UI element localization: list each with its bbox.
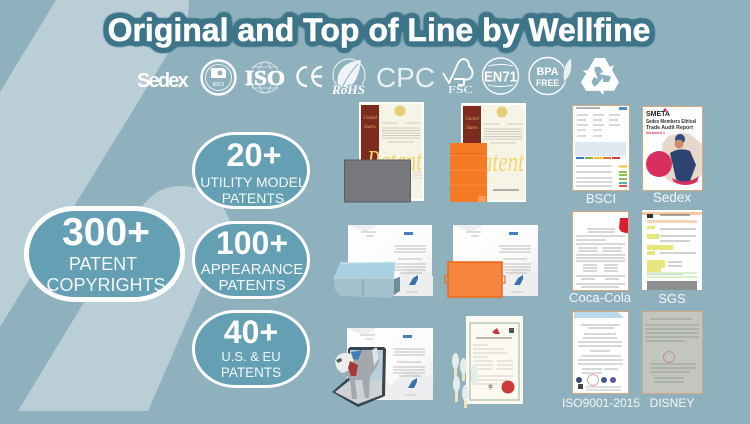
logo: recycling arrows: [577, 58, 622, 99]
logo: BPA free: FREE: [536, 78, 559, 89]
patent certificate with orange tray: States: [466, 126, 478, 131]
logo: CPC: CPC: [376, 62, 435, 93]
logo: FSC: [443, 59, 473, 96]
patent certificate with grey tray: [344, 102, 424, 202]
badge: 300+ patent copyrights: COPYRIGHTS: [46, 275, 166, 295]
tray: dark frame: [332, 347, 386, 407]
logo: RoHS: [331, 59, 365, 97]
appearance certificate with dog on tray: [332, 328, 433, 407]
document labels: [562, 190, 694, 410]
document labels: DISNEY: [650, 396, 694, 410]
document labels: SGS: [658, 291, 686, 306]
badge: 20+ utility model patents: 20+: [226, 137, 282, 173]
logo: BSCI: BSCI: [213, 82, 224, 88]
logo: EN71: [482, 58, 518, 94]
audit document: BSCI: [572, 106, 630, 190]
audit document: SGS: [642, 210, 702, 290]
copyright certificate with pads: 学: [488, 384, 493, 391]
badge: 20+ utility model patents: UTILITY MODEL: [200, 174, 306, 190]
audit document: Sedex SMETA: SMETA: [646, 111, 670, 118]
patent certificate with orange tray: United: [465, 117, 479, 122]
badge: 40+ U.S. and EU patents: [194, 312, 308, 386]
logo: CE mark: [297, 67, 322, 86]
logo: BPA free: BPA: [536, 66, 559, 78]
certification logos row: [137, 58, 622, 99]
document labels: ISO9001-2015: [562, 396, 640, 410]
audit document: ISO9001: [572, 312, 628, 394]
logo: RoHS: RoHS: [331, 82, 365, 97]
background shape: upper diagonal band: [0, 0, 189, 327]
logo: Sedex: Sedex: [137, 70, 189, 92]
badge: 100+ appearance patents: PATENTS: [219, 277, 285, 294]
badge: 100+ appearance patents: 100+: [216, 225, 288, 261]
badge: 40+ U.S. and EU patents: U.S. & EU: [221, 349, 281, 364]
appearance certificate with blue tray: [333, 225, 433, 298]
patent certificate with grey tray: States: [364, 125, 376, 130]
badge: 40+ U.S. and EU patents: PATENTS: [221, 365, 281, 380]
copyright certificate with pads: [452, 316, 523, 408]
badge: 300+ patent copyrights: PATENT: [69, 254, 137, 274]
audit document: Coca-Cola: [572, 212, 628, 290]
document labels: Sedex: [653, 190, 691, 205]
title: Original and Top of Line by Wellfine: [108, 12, 650, 48]
logo: FSC: FSC: [448, 85, 473, 96]
patent certificate with grey tray: Patent: [366, 145, 423, 177]
patent certificate with orange tray: [450, 103, 526, 202]
background shape: lower arch band: [18, 186, 230, 411]
logo: ISO: ISO: [245, 66, 285, 90]
audit document: Sedex SMETA: Trade Audit Report: [646, 125, 693, 131]
audit document: Sedex SMETA: Sedex Members Ethical: [646, 119, 696, 125]
document labels: BSCI: [586, 191, 616, 206]
document labels: Coca-Cola: [569, 290, 632, 305]
badge: 40+ U.S. and EU patents: 40+: [224, 314, 278, 350]
audit document: Disney: [642, 312, 702, 394]
badge: 100+ appearance patents: APPEARANCE: [201, 261, 303, 278]
appearance certificate with orange tray: [445, 225, 538, 297]
badge: 300+ patent copyrights: [26, 208, 182, 300]
logo: BSCI: [202, 60, 236, 94]
badge: 300+ patent copyrights: 300+: [62, 211, 150, 254]
badge: 100+ appearance patents: [194, 222, 308, 298]
audit document: Sedex SMETA: Version 6.1: [646, 131, 665, 135]
logo: BPA free: [529, 58, 572, 94]
logo: EN71: EN71: [484, 68, 517, 86]
badge: 20+ utility model patents: [194, 134, 308, 208]
dog: [345, 347, 379, 399]
patent certificate with grey tray: United: [363, 116, 377, 121]
audit document: Sedex SMETA: [642, 106, 702, 190]
patent certificate with orange tray: Patent: [468, 146, 525, 178]
badge: 20+ utility model patents: PATENTS: [222, 190, 284, 206]
